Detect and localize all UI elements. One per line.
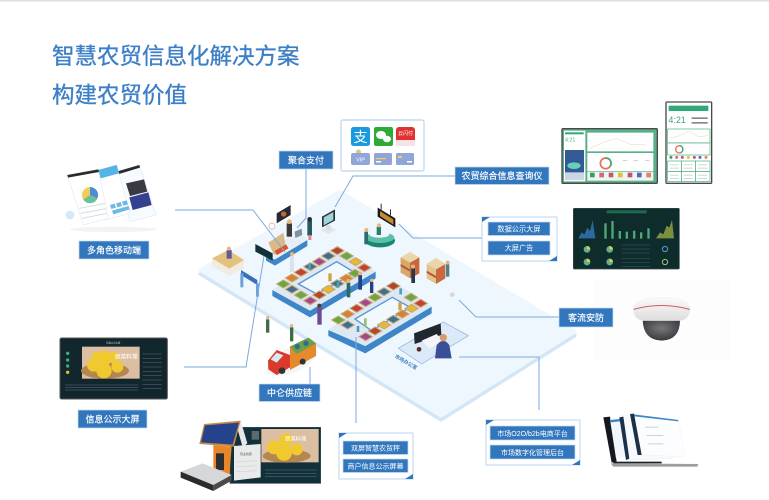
query kiosk bbox=[321, 209, 336, 234]
portrait query terminal bbox=[666, 102, 712, 183]
label: 中仑供应链: 中仑供应链 bbox=[267, 387, 312, 398]
label: 客流安防 bbox=[559, 308, 613, 327]
label group: data screen and ads: 数据公示大屏 bbox=[497, 224, 541, 234]
reception with ad screen bbox=[364, 204, 395, 247]
entry service desk bbox=[212, 247, 259, 297]
label: 多角色移动端: 多角色移动端 bbox=[87, 244, 141, 256]
data dashboard screen bbox=[573, 208, 679, 269]
market office desk bbox=[393, 322, 468, 372]
icon: bank card bbox=[374, 153, 392, 165]
landscape query terminal bbox=[562, 129, 657, 183]
label group: e-commerce and admin bbox=[486, 420, 580, 465]
label group: dual screen scale bbox=[339, 433, 413, 479]
isometric market floor plan bbox=[200, 192, 575, 420]
label: 信息公示大屏 bbox=[78, 410, 147, 428]
fruit supply truck bbox=[262, 316, 322, 383]
mobile app screens bbox=[66, 165, 157, 232]
label: 聚合支付 bbox=[279, 151, 333, 169]
title: 智慧农贸信息化解决方案 bbox=[52, 44, 300, 69]
portrait query terminal: 4:21 bbox=[668, 115, 686, 125]
label group: e-commerce and admin: 市场数字化管理后台 bbox=[501, 448, 564, 457]
info display screen: 信息公示大屏 bbox=[106, 340, 121, 344]
stall ring two bbox=[328, 281, 432, 353]
icon: vip card: VIP bbox=[356, 158, 365, 164]
label group: e-commerce and admin: 市场O2O/b2b电商平台 bbox=[497, 429, 568, 438]
label: 客流安防: 客流安防 bbox=[568, 312, 604, 323]
shoppers bbox=[290, 252, 402, 332]
security camera bbox=[594, 280, 730, 360]
cashier counter and shoppers bbox=[255, 205, 312, 266]
info display screen bbox=[60, 338, 167, 399]
landscape query terminal: 4:21 bbox=[565, 138, 575, 144]
market office desk: 市场办公室 bbox=[393, 353, 418, 372]
title bbox=[52, 44, 300, 108]
label group: dual screen scale: 商户信息公示屏幕 bbox=[348, 462, 404, 470]
payment methods card bbox=[341, 120, 424, 171]
label: 信息公示大屏: 信息公示大屏 bbox=[85, 414, 140, 424]
info display screen: 蔬菜料理 bbox=[115, 352, 138, 360]
stall ring one bbox=[272, 246, 376, 317]
label: 中仑供应链 bbox=[259, 384, 320, 402]
smart scale and merchant screen bbox=[181, 421, 321, 491]
label group: dual screen scale: 双屏智慧农贸秤 bbox=[351, 444, 400, 452]
connector lines bbox=[175, 169, 559, 423]
smart scale and merchant screen: 蔬菜料理 bbox=[285, 435, 307, 443]
label: 农贸综合信息查询仪 bbox=[455, 167, 549, 184]
icon: member card bbox=[396, 153, 414, 165]
laptop with management system bbox=[603, 414, 698, 467]
label group: data screen and ads: 大屏广告 bbox=[505, 244, 533, 252]
title: 构建农贸价值 bbox=[52, 83, 187, 108]
icon: wechat pay bbox=[374, 127, 393, 146]
icon: alipay: 支 bbox=[354, 129, 368, 145]
label: 农贸综合信息查询仪: 农贸综合信息查询仪 bbox=[461, 170, 543, 181]
goods shelves bbox=[401, 252, 450, 284]
security camera dot bbox=[450, 292, 455, 297]
label: 多角色移动端 bbox=[79, 241, 149, 259]
platform base bbox=[200, 192, 575, 420]
label group: data screen and ads bbox=[482, 217, 557, 261]
smart scale and merchant screen: 营业执照 bbox=[240, 451, 252, 456]
label: 聚合支付: 聚合支付 bbox=[288, 154, 324, 166]
icon: union pay: 云闪付 bbox=[398, 130, 413, 137]
